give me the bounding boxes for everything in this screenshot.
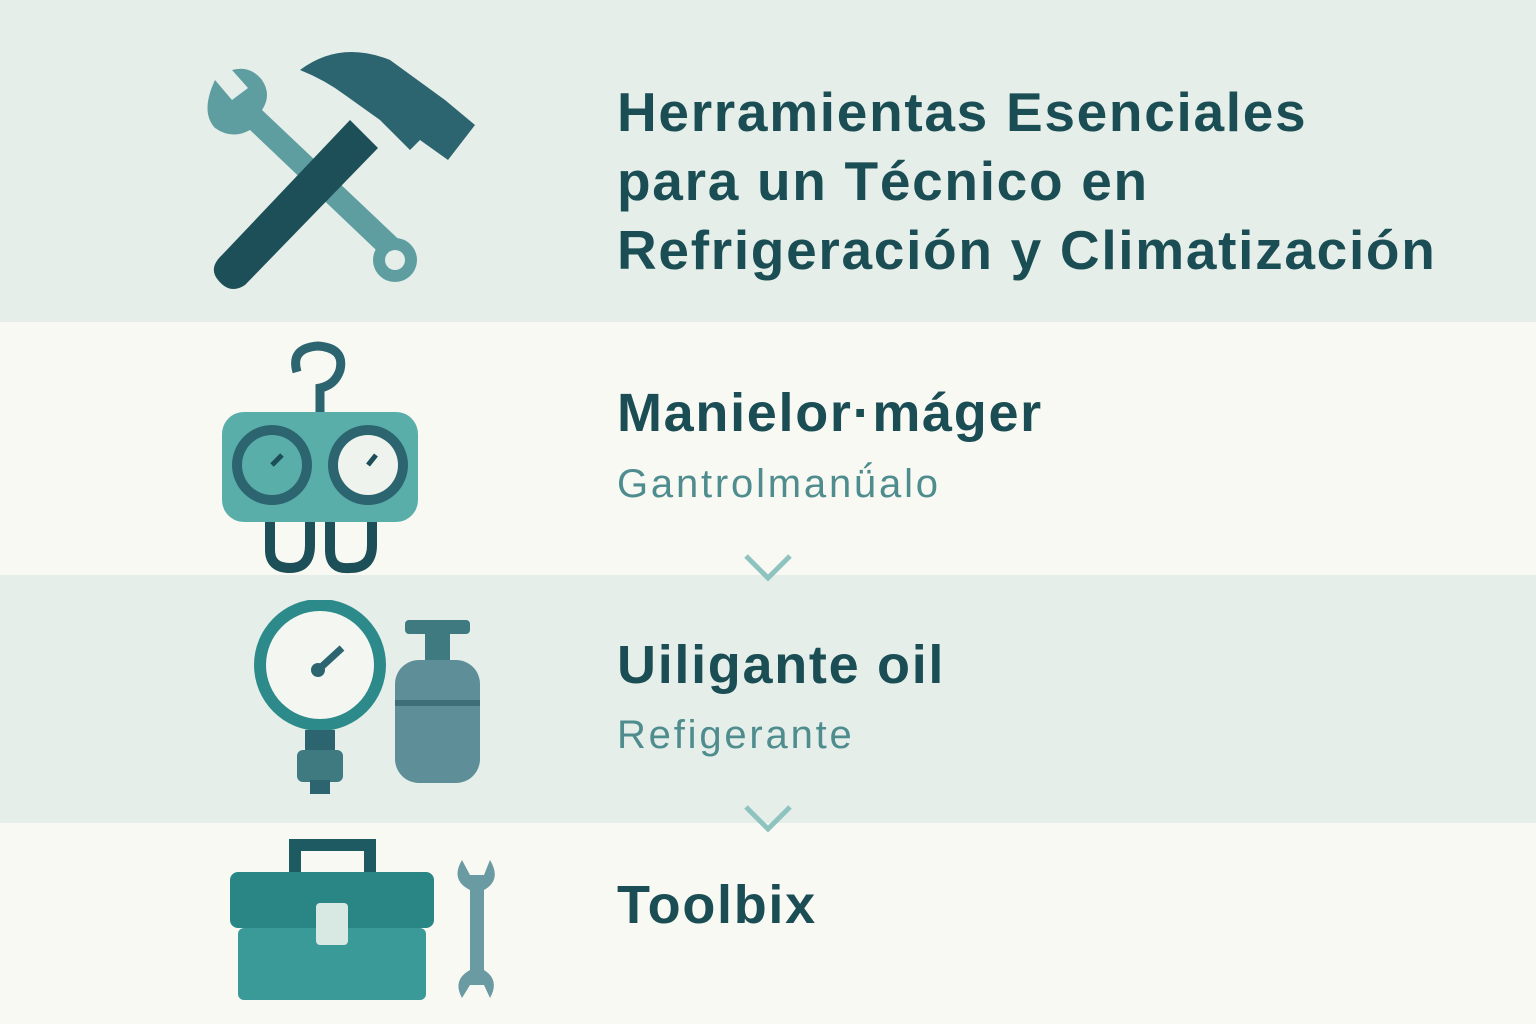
item heading: Toolbix: Toolbix: [617, 875, 817, 935]
icon: gauge and cylinder: [254, 600, 480, 794]
arrow: [744, 805, 792, 832]
item heading: Uiligante oil: Uiligante oil: [617, 635, 945, 695]
title: para un Técnico en: [617, 150, 1149, 212]
item subtitle: Gantrolmanǘalo: [617, 462, 941, 506]
hammer: [214, 52, 475, 289]
item subtitle: Refigerante: [617, 713, 855, 757]
title: Herramientas Esenciales: [617, 81, 1307, 143]
wrench: [208, 69, 417, 282]
title: [617, 81, 1437, 281]
icon: toolbox and wrench: [230, 839, 495, 1000]
icon: wrench and hammer: [208, 52, 475, 289]
icon: manifold gauge: [222, 342, 418, 574]
arrow: [744, 554, 792, 582]
item heading: Manielor·máger: Manielor·máger: [617, 383, 1043, 443]
title: Refrigeración y Climatización: [617, 219, 1437, 281]
